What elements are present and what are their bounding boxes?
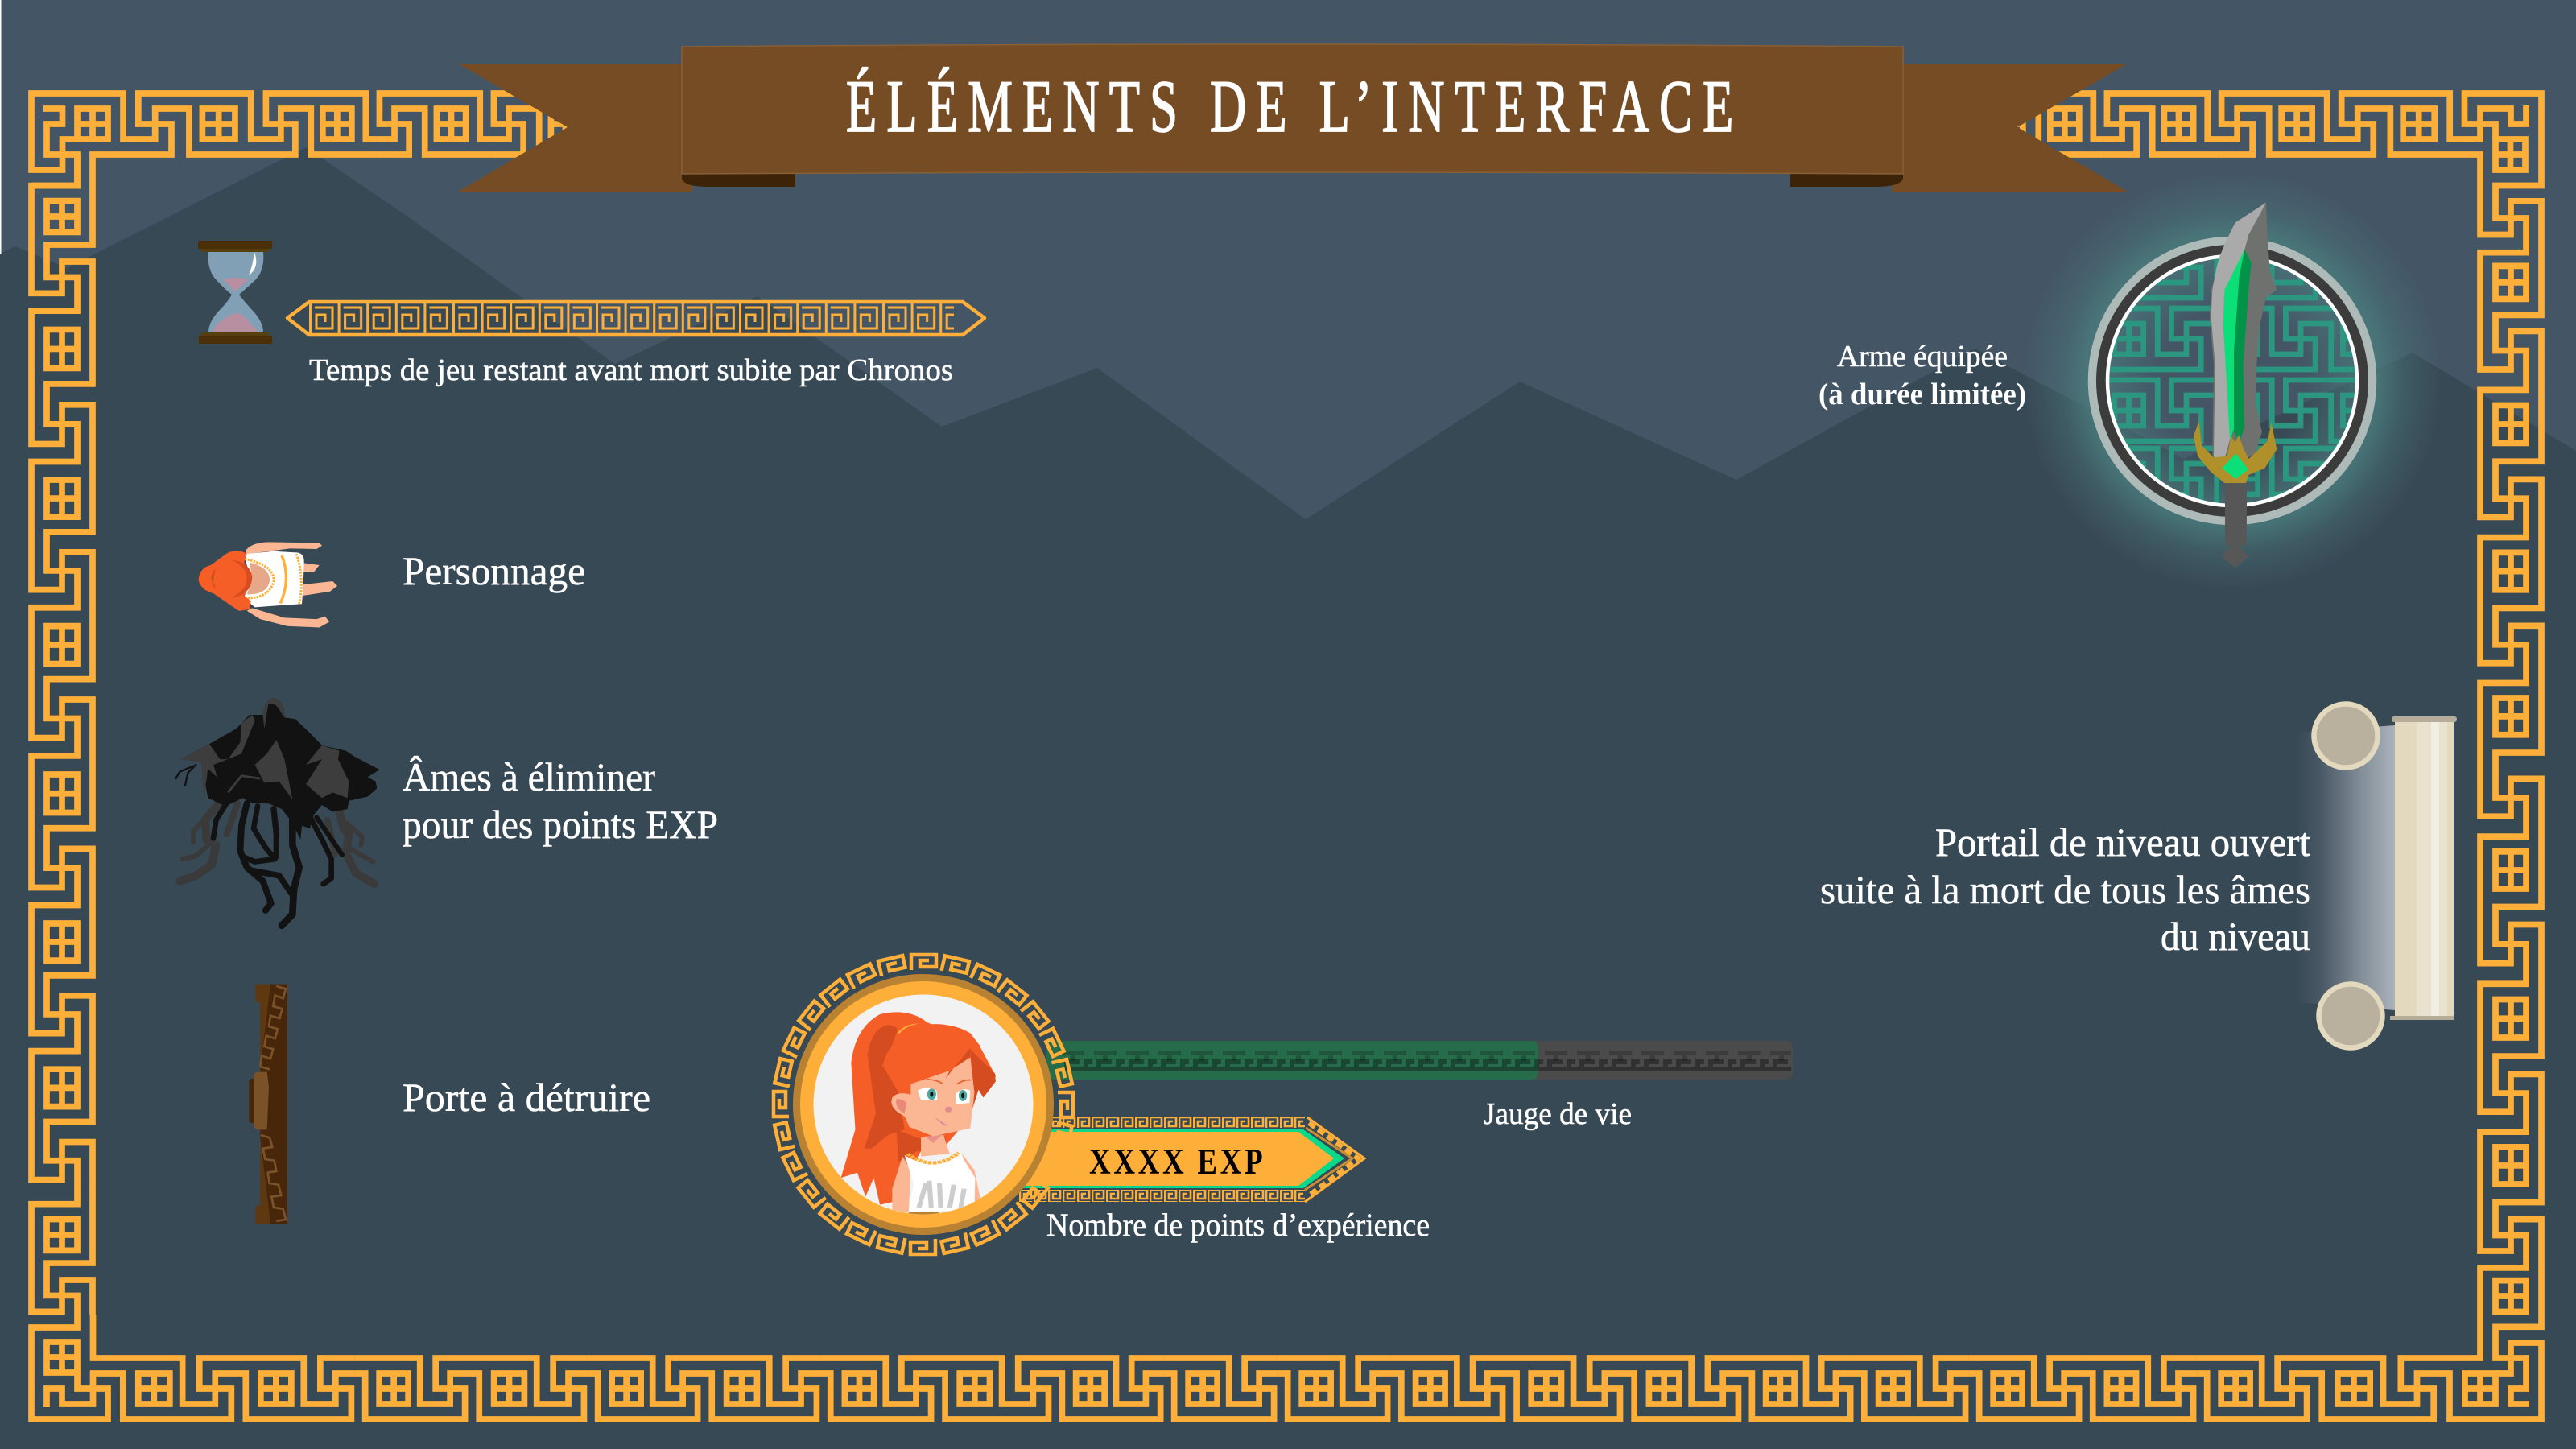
border: bottom run: [111, 1358, 2437, 1419]
label: portal: [1820, 819, 2310, 959]
avatar medallion: [771, 953, 1075, 1256]
title: ÉLÉMENTS DE L’INTERFACE: [846, 66, 1733, 148]
experience value: XXXX EXP: [1089, 1141, 1263, 1182]
timer bar: [287, 302, 985, 335]
portal light beam: [2297, 725, 2395, 1010]
portal top disc: [2314, 704, 2378, 768]
label: souls: pour des points EXP: [402, 802, 718, 847]
portal column: [2390, 716, 2457, 1020]
label: portal: du niveau: [2161, 914, 2310, 959]
border: bottom-right corner: [2437, 1339, 2541, 1419]
weapon ring key pattern: [2109, 258, 2355, 503]
border: top-left corner: [31, 93, 135, 185]
label: personnage: Personnage: [402, 548, 585, 593]
health bar: [1046, 1041, 1793, 1080]
avatar gold rings: [793, 974, 1054, 1235]
label: weapon: Arme équipée: [1837, 340, 2008, 374]
label: weapon: (à durée limitée): [1818, 378, 2026, 411]
label: portal: suite à la mort de tous les âmes: [1820, 867, 2310, 912]
icon: door: [249, 985, 287, 1224]
timer caption: Temps de jeu restant avant mort subite par Chronos: [309, 353, 953, 387]
border: right run: [2480, 198, 2541, 1339]
label: experience: Nombre de points d’expérience: [1046, 1207, 1430, 1243]
border: bottom-left corner: [31, 1315, 111, 1419]
label: portal: Portail de niveau ouvert: [1935, 819, 2310, 865]
icon: hourglass: [198, 241, 272, 344]
icon: character seen from above: [199, 542, 337, 627]
label: souls: Âmes à éliminer: [402, 754, 655, 799]
weapon glow: [2023, 171, 2442, 590]
label: health: Jauge de vie: [1484, 1097, 1632, 1131]
panel: weapon ring: [2040, 194, 2425, 573]
portal bottom disc: [2318, 984, 2383, 1048]
label: door: Porte à détruire: [402, 1075, 650, 1120]
border: top-right corner: [2462, 93, 2541, 198]
title ribbon: [458, 44, 2128, 192]
icon: soul wraith: [175, 698, 380, 926]
icon: portal: [2297, 704, 2457, 1048]
experience banner: [1019, 1117, 1364, 1202]
label: weapon: [1818, 340, 2026, 411]
border: left run: [31, 174, 93, 1315]
border: top run left: [135, 93, 605, 155]
border: top run right: [1991, 93, 2462, 155]
icon: sword: [2194, 203, 2277, 568]
label: souls: [402, 754, 718, 847]
weapon ring circles: [2092, 241, 2372, 521]
avatar portrait: [841, 1012, 996, 1215]
avatar key ring: [753, 928, 1107, 1286]
